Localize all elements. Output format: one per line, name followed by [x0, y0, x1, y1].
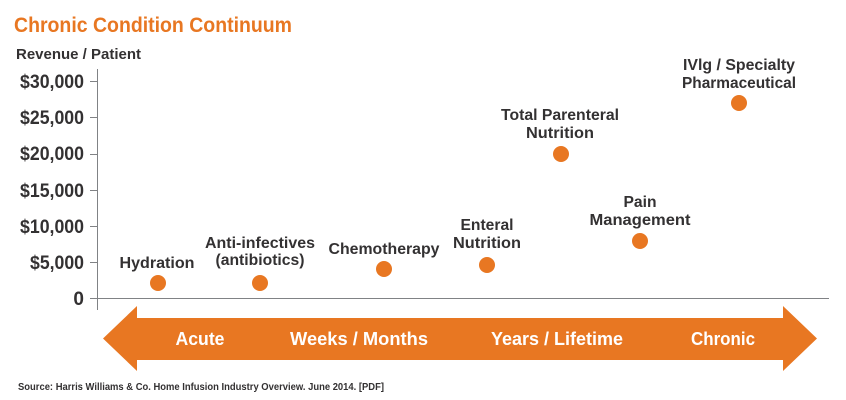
data point: Enteral Nutrition: Enteral: [460, 217, 514, 234]
continuum arrow: Chronic: [691, 328, 755, 349]
data point: IVlg / Specialty Pharmaceutical: [682, 57, 796, 111]
y-axis title: Revenue / Patient: [16, 46, 141, 63]
data point: Anti-infectives: Anti-infectives: [205, 235, 315, 252]
data point: Chemotherapy: [328, 241, 440, 277]
continuum arrow: Acute: [176, 328, 224, 349]
data point: Hydration: Hydration: [120, 255, 194, 272]
data point: Total Parenteral Nutrition: Nutrition: [526, 125, 594, 142]
data point: Hydration: [120, 255, 194, 291]
data point: IVlg / Specialty Pharmaceutical: IVlg / Specialty: [683, 57, 795, 74]
data point: Anti-infectives: [205, 235, 315, 291]
data point: IVlg / Specialty Pharmaceutical: Pharmaceutical: [682, 75, 796, 92]
continuum arrow: Weeks / Months: [290, 328, 428, 349]
y-axis labels: $20,000: [20, 144, 84, 165]
y-axis labels: [20, 72, 84, 310]
data point: Enteral Nutrition: Nutrition: [453, 235, 521, 252]
continuum arrow: [103, 306, 817, 371]
y-axis labels: $25,000: [20, 108, 84, 129]
data point: Anti-infectives: (antibiotics): [216, 252, 304, 269]
data point: Total Parenteral Nutrition: [501, 107, 619, 162]
chart axes: [90, 69, 829, 310]
source note: Source: Harris Williams & Co. Home Infusion Industry Overview. June 2014. [PDF]: [18, 381, 384, 393]
data point: Enteral Nutrition: [453, 217, 521, 273]
y-axis labels: $30,000: [20, 72, 84, 93]
data point: Pain Management: Pain: [624, 194, 656, 211]
data point: Pain Management: Management: [590, 212, 691, 229]
y-axis labels: $10,000: [20, 217, 84, 238]
title: Chronic Condition Continuum: [14, 14, 292, 37]
y-axis labels: $15,000: [20, 181, 84, 202]
y-axis labels: 0: [73, 289, 84, 310]
y-axis labels: $5,000: [30, 253, 84, 274]
data point: Pain Management: [590, 194, 691, 249]
data point: Chemotherapy: Chemotherapy: [328, 241, 440, 258]
data point: Total Parenteral Nutrition: Total Parenteral: [501, 107, 619, 124]
continuum arrow: Years / Lifetime: [491, 328, 623, 349]
